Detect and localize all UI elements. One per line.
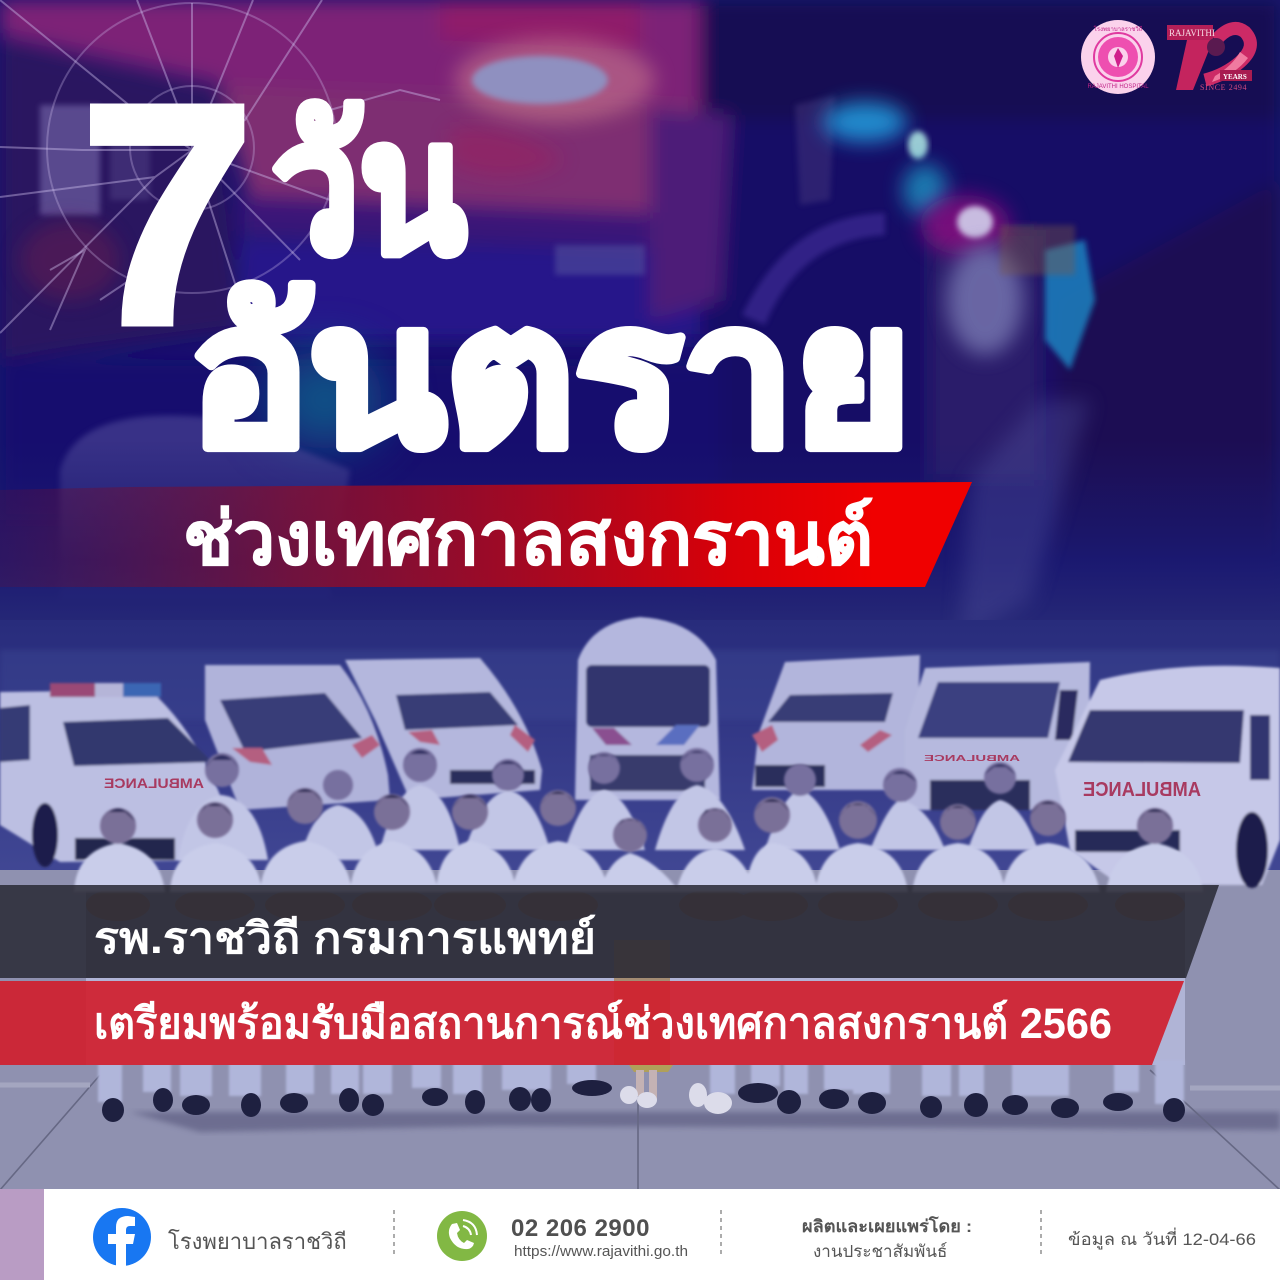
band heading: hospital: รพ.ราชวิถี กรมการแพทย์: [94, 914, 596, 963]
logo: Rajavithi hospital seal: โรงพยาบาลราชวิถี: [1094, 25, 1143, 33]
van 3: [345, 658, 542, 800]
ambulance labels: AMBULANCE: [923, 754, 1020, 763]
footer: [0, 1189, 1280, 1280]
subtitle text: ช่วงเทศกาลสงกรานต์: [183, 497, 873, 580]
icon: phone: [437, 1211, 487, 1261]
logo: Rajavithi 72 years: YEARS: [1223, 73, 1247, 81]
ambulance labels: AMBULANCE: [1083, 779, 1201, 801]
title: อันตราย: อันตราย: [189, 267, 911, 486]
floor shadows and joints: [0, 1070, 1280, 1190]
ambulance labels: [104, 754, 1201, 801]
staff torsos behind bands: [86, 886, 1185, 1065]
logo: Rajavithi 72 years: RAJAVITHI: [1169, 28, 1215, 38]
website: https://www.rajavithi.go.th: [514, 1243, 688, 1260]
title: 7: 7: [80, 39, 255, 390]
van 7: [1055, 666, 1280, 885]
title: วัน: วัน: [272, 86, 466, 290]
van 5: [752, 655, 920, 790]
logo: Rajavithi hospital seal: [1081, 20, 1155, 94]
producer: [802, 1216, 972, 1261]
logo: Rajavithi 72 years: [1167, 25, 1252, 92]
subtitle ribbon: [0, 482, 972, 587]
data date: ข้อมูล ณ วันที่ 12-04-66: [1068, 1227, 1256, 1250]
logo: Rajavithi hospital seal: RAJAVITHI HOSPITAL: [1087, 84, 1149, 90]
logo: Rajavithi 72 years: SINCE 2494: [1200, 83, 1247, 92]
van 4: [575, 617, 720, 800]
ambulance labels: AMBULANCE: [104, 775, 204, 791]
phone number: 02 206 2900: [511, 1215, 650, 1242]
van 6: [905, 662, 1090, 810]
staff back row: [178, 748, 1038, 860]
van 2: [205, 665, 390, 810]
red band: [0, 981, 1184, 1065]
staff front row: [74, 788, 1203, 892]
band text: preparedness: เตรียมพร้อมรับมือสถานการณ์ช่วงเทศกาลสงกรานต์ 2566: [94, 999, 1112, 1048]
icon: facebook: [93, 1208, 151, 1266]
facebook name: โรงพยาบาลราชวิถี: [168, 1229, 347, 1254]
van 1: [0, 690, 225, 862]
staff legs and shoes: [98, 1060, 1185, 1122]
producer: ผลิตและเผยแพร่โดย :: [802, 1216, 972, 1236]
dark band: [0, 885, 1219, 978]
cracked glass overlay: [0, 0, 440, 333]
lower photo: ambulance fleet and staff: [0, 617, 1280, 1190]
background: night scene photo: [0, 0, 1280, 640]
producer: งานประชาสัมพันธ์: [813, 1242, 947, 1261]
title: [80, 39, 911, 486]
ambulance row: [0, 617, 1280, 888]
